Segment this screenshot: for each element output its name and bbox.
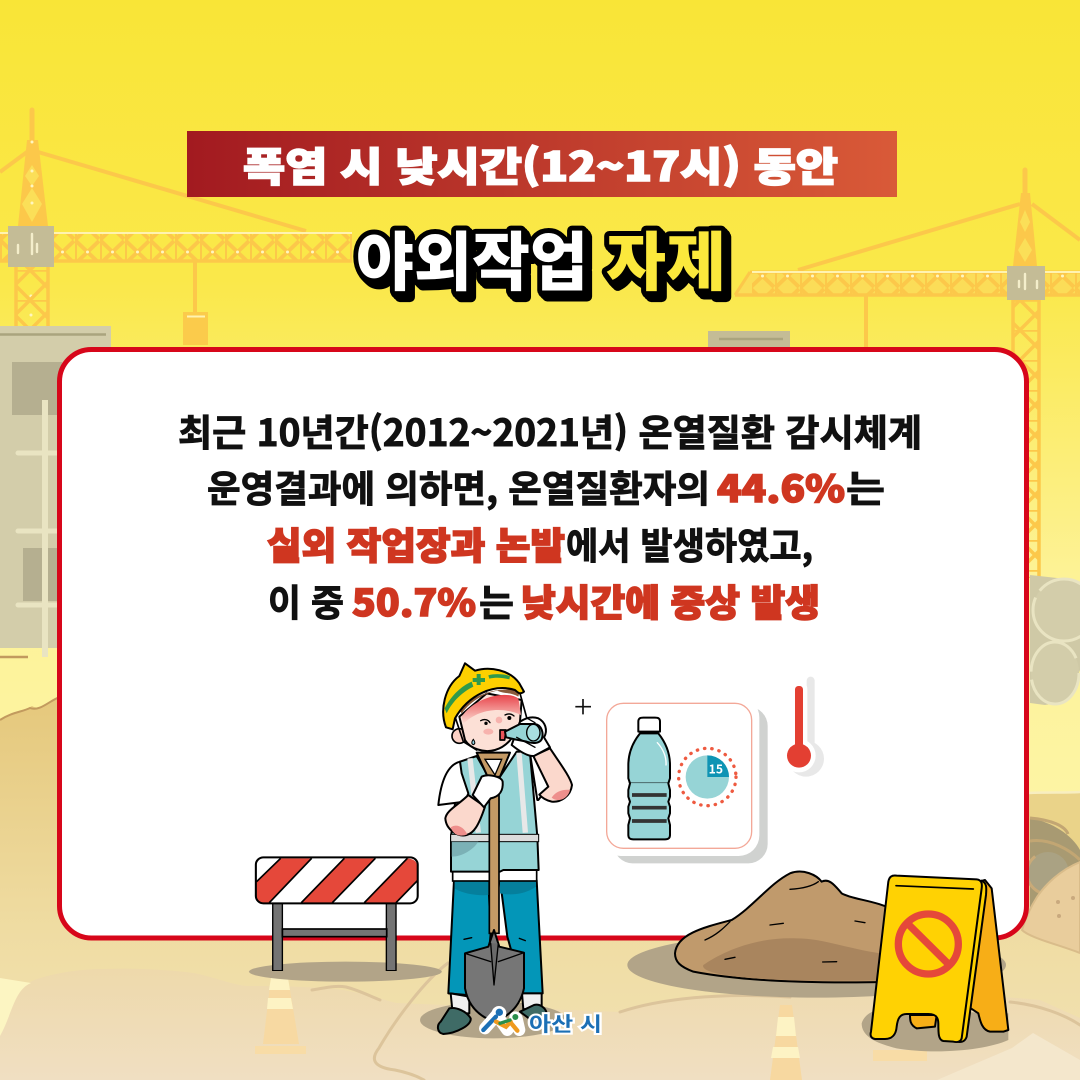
headline: [356, 212, 726, 304]
right sleeve and arm: [530, 748, 572, 802]
hill and ground left: [0, 697, 60, 1080]
glove on bottle: [512, 717, 550, 756]
body text: 는: [846, 459, 885, 513]
left sleeve and arm: [438, 762, 485, 836]
worker: [420, 663, 824, 1038]
hill outline: [0, 697, 60, 720]
headline: 자제: [606, 212, 726, 304]
body text: 는: [479, 573, 514, 627]
socks and shoes: [438, 993, 547, 1034]
pipes right: [1030, 575, 1080, 705]
ground right: [1029, 793, 1080, 1080]
crane left: [0, 110, 352, 345]
title bar: [187, 131, 897, 197]
body text: 44.6%: [717, 459, 845, 513]
sewer pipe right: [1027, 818, 1080, 930]
body text: 실외 작업장과 논밭: [267, 516, 565, 570]
body text: 에서 발생하였고,: [566, 516, 813, 570]
bottle in hand: [505, 718, 543, 747]
road barrier: [249, 857, 442, 982]
sand mound: [627, 872, 1006, 998]
traffic cone left: [255, 978, 306, 1054]
road cracks: [312, 963, 1080, 1080]
timer: 15: [709, 759, 723, 777]
background sky: [0, 0, 1080, 800]
body text: 운영결과에 의하면, 온열질환자의: [207, 459, 710, 513]
helmet: [443, 663, 524, 729]
headline: 야외작업: [356, 212, 588, 304]
timer: [679, 748, 736, 806]
legs: [448, 880, 543, 997]
body text: 이 중: [268, 573, 344, 627]
sand hill right: [1022, 862, 1080, 953]
hand on shovel: [473, 775, 503, 807]
ground main: [57, 900, 1080, 1080]
thermometer: [782, 677, 824, 777]
plus sign: [575, 699, 591, 714]
crane right: [708, 170, 1080, 578]
body text: [178, 403, 922, 627]
head: [452, 689, 527, 751]
water and rest card: [600, 697, 768, 863]
horizon line: [1029, 792, 1080, 793]
shovel: [465, 753, 524, 1022]
pale patch left: [0, 978, 31, 1036]
hidden cone base: [873, 1050, 927, 1061]
Asan city logo: 아산 시: [529, 1008, 602, 1037]
sand blob: [0, 969, 1080, 1080]
torso vest: [451, 752, 539, 881]
body text: 최근 10년간(2012~2021년) 온열질환 감시체계: [178, 403, 922, 457]
content card: [60, 350, 1026, 938]
warning sign: [862, 876, 1008, 1051]
Asan city logo: [483, 1006, 602, 1037]
traffic cone right: [770, 1005, 802, 1080]
pale slab right: [937, 1033, 1080, 1080]
body text: 낮시간에 증상 발생: [521, 573, 820, 627]
water bottle: [628, 718, 670, 839]
building left: [0, 326, 111, 657]
body text: 50.7%: [352, 573, 476, 627]
title text: 폭염 시 낮시간(12~17시) 동안: [243, 135, 838, 193]
